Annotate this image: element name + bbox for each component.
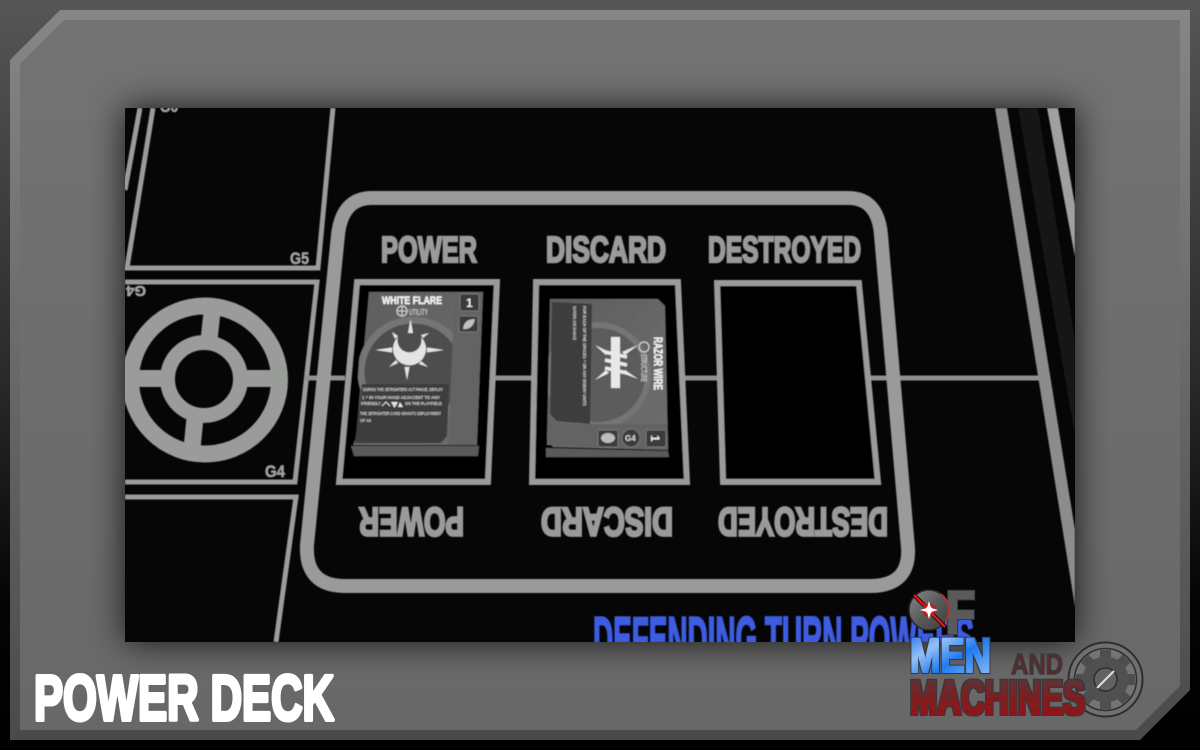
connector lines bbox=[305, 376, 1040, 380]
target symbol bbox=[122, 306, 280, 454]
button chips bbox=[598, 429, 666, 447]
inverted heading: discard: DISCARD bbox=[541, 499, 673, 543]
logo word: of bbox=[909, 579, 975, 646]
inverted heading: destroyed: DESTROYED bbox=[718, 499, 888, 543]
rules text panel bbox=[550, 302, 592, 424]
rules text panel: THE JETFIGHTER CARD GRANTS DEPLOYMENT bbox=[360, 411, 441, 417]
discard slot bbox=[532, 282, 687, 482]
cell label G6 clipped: G6 bbox=[160, 97, 178, 116]
cell label G4 inverted: G4 bbox=[125, 282, 146, 299]
rules text panel: ON THE PLAYFIELD bbox=[405, 401, 442, 407]
icon: white flare sun bbox=[375, 319, 444, 380]
card emblem ring bbox=[547, 325, 668, 450]
rules text panel: FOR EACH OF THE SPACES ^ OR ANY ENEMY UNITS bbox=[581, 306, 587, 407]
button chips: G4 bbox=[625, 434, 636, 443]
deck area outline bbox=[307, 198, 908, 586]
logo word: men: MEN bbox=[910, 630, 991, 683]
cost chip: 1 bbox=[466, 296, 473, 310]
game board screenshot bbox=[122, 97, 1075, 672]
slot heading: discard: DISCARD bbox=[546, 229, 666, 270]
cell label G5: G5 bbox=[290, 249, 309, 268]
heading: power deck: POWER DECK bbox=[34, 662, 334, 734]
rules text panel bbox=[355, 384, 449, 443]
logo gear bbox=[1068, 642, 1142, 716]
left board grid bbox=[125, 108, 333, 642]
card base bbox=[351, 446, 479, 456]
power slot bbox=[339, 282, 497, 482]
game logo bbox=[909, 579, 1142, 725]
card base bbox=[546, 448, 669, 457]
card type rotated: STRUCTURE bbox=[639, 354, 648, 382]
rules text panel: SUFFERS ONE DAMAGE bbox=[571, 306, 577, 340]
destroyed slot bbox=[717, 283, 878, 482]
rules text panel: DURING THE JETFIGHTERS ACT PHASE, DEPLOY bbox=[363, 387, 444, 393]
logo word: and: AND bbox=[1011, 649, 1063, 681]
icon: razor wire bbox=[595, 337, 638, 388]
cost chip bbox=[460, 294, 479, 311]
image drop shadow bbox=[125, 108, 1075, 642]
logo word: of: F bbox=[946, 579, 975, 646]
card: razor wire bbox=[546, 299, 669, 457]
card type rotated bbox=[639, 342, 649, 382]
right board edge bbox=[995, 108, 1075, 607]
card title: WHITE FLARE bbox=[382, 295, 442, 307]
cell label G4: G4 bbox=[265, 462, 285, 481]
card emblem ring bbox=[361, 292, 483, 445]
rules text panel: OF X4 bbox=[360, 418, 371, 424]
card type: UTILITY bbox=[409, 308, 428, 317]
rules text panel: FRIENDLY bbox=[361, 401, 382, 407]
logo word: machines: MACHINES bbox=[910, 672, 1085, 725]
inverted heading: power: POWER bbox=[359, 499, 464, 543]
button chips: 1 bbox=[648, 435, 662, 442]
slot heading: power: POWER bbox=[381, 229, 477, 270]
card title rotated: RAZOR WIRE bbox=[651, 337, 665, 390]
icon: leaf chip bbox=[459, 316, 478, 332]
slot heading: destroyed: DESTROYED bbox=[708, 229, 861, 270]
card type bbox=[397, 306, 428, 317]
rules text panel: 1 ^ IN YOUR HAND ADJACENT TO ANY bbox=[362, 395, 441, 401]
card: white flare bbox=[351, 292, 483, 456]
